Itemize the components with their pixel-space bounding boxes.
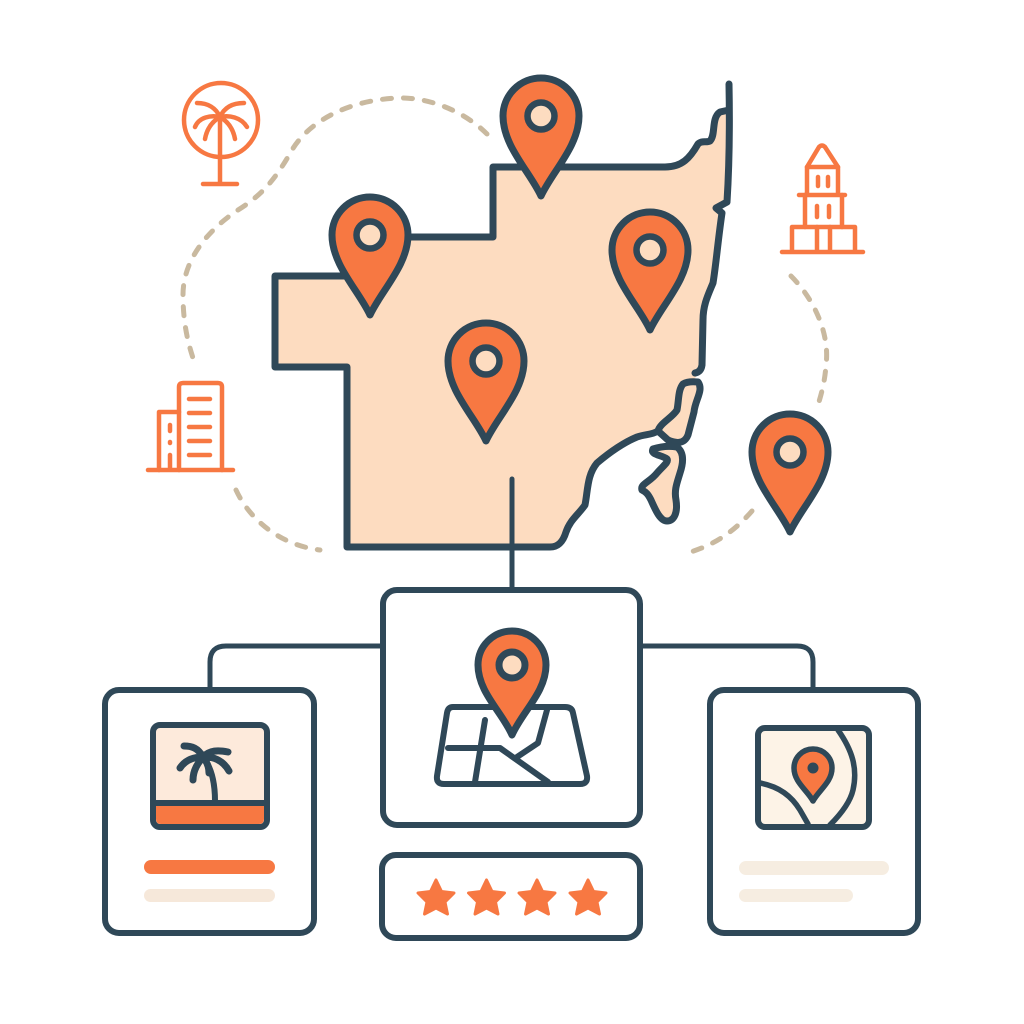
pin: top xyxy=(503,78,579,196)
image thumbnail: palm xyxy=(153,725,267,827)
card: center xyxy=(383,590,640,825)
barrier island xyxy=(658,382,700,442)
connector: right card xyxy=(641,646,813,690)
icon: tower xyxy=(782,146,863,252)
pin: offshore xyxy=(752,414,828,532)
southern island xyxy=(642,446,683,521)
dashed route: lower right xyxy=(687,511,752,553)
dashed route: upper left xyxy=(183,98,487,358)
star rating xyxy=(418,880,606,914)
pin: center xyxy=(448,323,524,441)
text placeholder: light bar xyxy=(739,889,853,902)
pin: left xyxy=(332,197,408,315)
card: left xyxy=(105,690,314,933)
image thumbnail: map with pin xyxy=(758,728,869,827)
connector from map to center card xyxy=(510,479,514,590)
pin: east xyxy=(612,212,688,330)
icon: palm in circle xyxy=(184,83,258,184)
card: right xyxy=(710,690,918,933)
rating card xyxy=(382,855,640,938)
icon: office buildings xyxy=(148,383,233,470)
text placeholder: light bar xyxy=(739,861,889,875)
icon: center pin xyxy=(478,631,546,735)
connector: left card xyxy=(210,646,381,690)
text placeholder: light bar xyxy=(144,889,275,902)
icon: folded map xyxy=(437,707,587,784)
text placeholder: orange bar xyxy=(144,860,275,874)
dashed route: lower left xyxy=(236,490,320,550)
dashed route: right xyxy=(791,276,827,405)
map of region xyxy=(275,84,729,547)
